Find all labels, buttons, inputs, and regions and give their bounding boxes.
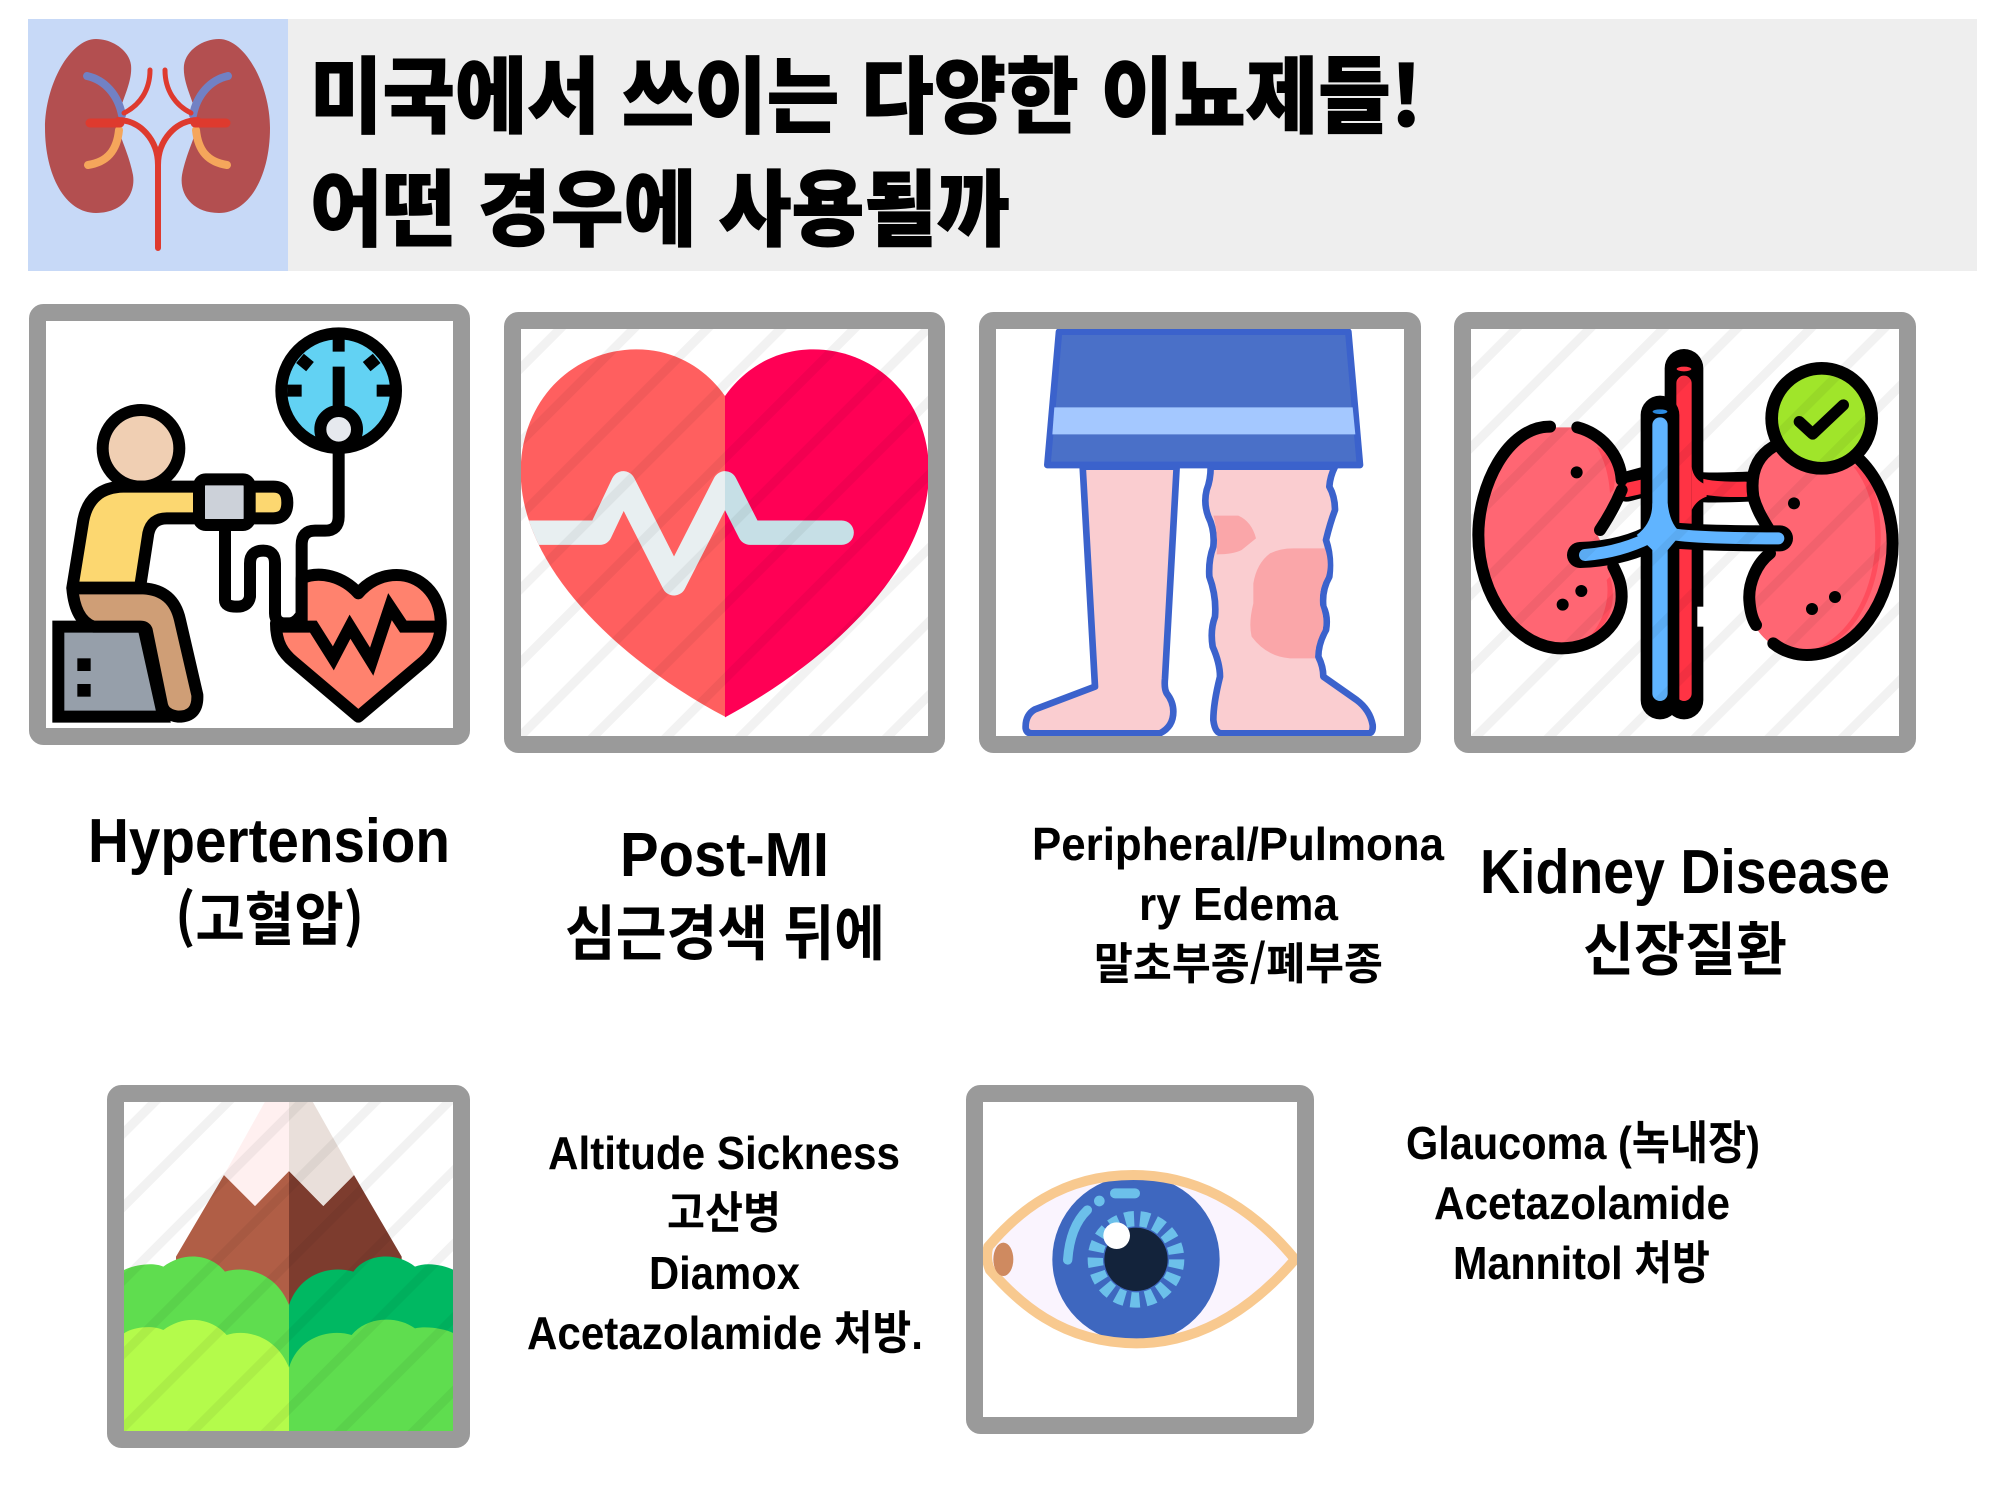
frame bbox=[1462, 320, 1908, 744]
caption: hypertension bbox=[88, 807, 450, 957]
caption: glaucoma: Glaucoma (녹내장) bbox=[1406, 1117, 1760, 1169]
icon: patient with blood pressure cuff bbox=[58, 333, 441, 717]
caption: glaucoma: Acetazolamide bbox=[1434, 1177, 1730, 1229]
caption: altitude sickness: Diamox bbox=[649, 1247, 800, 1299]
caption: hypertension: (고혈압) bbox=[175, 873, 364, 957]
caption: kidney disease bbox=[1480, 838, 1890, 987]
icon: heart with pulse bbox=[513, 329, 929, 737]
caption: kidney disease: Kidney Disease bbox=[1480, 838, 1890, 907]
caption: post-MI bbox=[565, 821, 885, 973]
caption: kidney disease: 신장질환 bbox=[1583, 903, 1787, 987]
frame bbox=[116, 1094, 462, 1440]
panel: edema legs bbox=[988, 320, 1412, 744]
title line 2: 어떤 경우에 사용될까 bbox=[310, 143, 1010, 263]
caption: hypertension: Hypertension bbox=[88, 807, 450, 876]
caption: glaucoma: Mannitol 처방 bbox=[1453, 1237, 1710, 1289]
caption: glaucoma bbox=[1406, 1117, 1760, 1289]
panel: post-MI heart bbox=[512, 320, 936, 744]
icon: mountain with bushes bbox=[124, 1102, 454, 1433]
panel: altitude sickness bbox=[116, 1094, 462, 1440]
caption: edema: Peripheral/Pulmona bbox=[1032, 818, 1444, 870]
frame bbox=[988, 320, 1412, 744]
panel: kidney disease bbox=[1462, 320, 1908, 744]
caption: post-MI: Post-MI bbox=[620, 821, 829, 890]
icon: kidneys with check mark bbox=[1471, 329, 1900, 737]
header band bbox=[28, 19, 1977, 271]
caption: altitude sickness: 고산병 bbox=[667, 1177, 781, 1241]
frame bbox=[512, 320, 936, 744]
caption: post-MI: 심근경색 뒤에 bbox=[565, 886, 885, 973]
icon: legs with swelling bbox=[1026, 332, 1373, 733]
caption: edema: 말초부종/폐부종 bbox=[1094, 928, 1383, 992]
frame bbox=[38, 312, 462, 736]
icon: eye bbox=[987, 1175, 1295, 1343]
caption: altitude sickness: Acetazolamide 처방. bbox=[527, 1307, 923, 1359]
panel: glaucoma bbox=[974, 1094, 1306, 1426]
caption: altitude sickness bbox=[527, 1127, 923, 1359]
icon: kidneys on blue tile bbox=[28, 19, 288, 271]
caption: edema bbox=[1032, 818, 1444, 992]
caption: edema: ry Edema bbox=[1139, 878, 1338, 930]
panel: hypertension bbox=[38, 312, 462, 736]
frame bbox=[974, 1094, 1306, 1426]
title line 1: 미국에서 쓰이는 다양한 이뇨제들! bbox=[310, 30, 1422, 150]
caption: altitude sickness: Altitude Sickness bbox=[548, 1127, 900, 1179]
